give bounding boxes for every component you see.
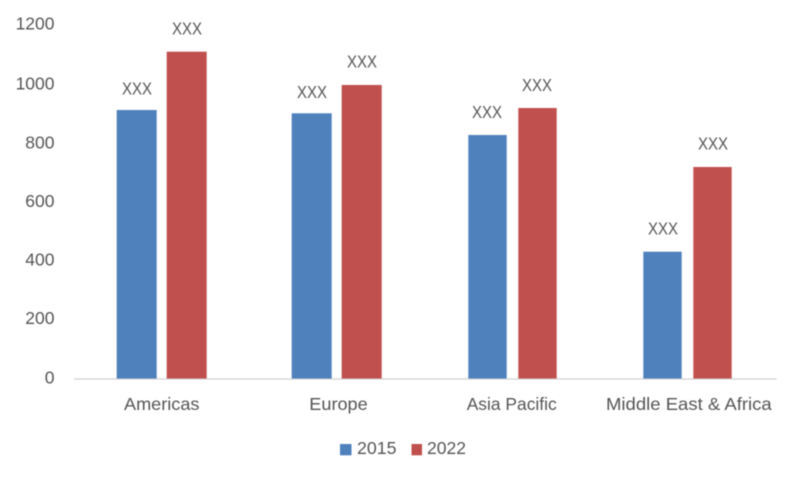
group: Europe: XXX [297,82,327,102]
group: Middle East & Africa: XXX [698,134,728,154]
group: Asia Pacific: XXX [522,75,552,95]
y axis labels: 600 [25,191,55,211]
group: Europe [292,52,382,378]
x axis labels: Americas [124,394,200,414]
y axis labels [16,14,55,388]
group: Middle East & Africa: XXX [648,218,678,238]
group: Europe: XXX [347,52,377,72]
group: Americas [117,18,207,378]
y axis labels: 0 [45,368,55,388]
y axis labels: 200 [25,308,55,328]
y axis labels: 400 [25,250,55,270]
group: Asia Pacific: XXX [472,102,502,122]
x axis labels [124,394,772,414]
legend: 2022 [427,438,466,458]
legend [340,438,466,458]
x axis labels: Middle East & Africa [606,394,772,414]
legend: 2015 [357,438,396,458]
group: Asia Pacific [468,75,557,378]
group: Middle East & Africa [643,134,732,378]
group: Americas: XXX [172,18,202,38]
y axis labels: 1200 [16,14,55,34]
x axis labels: Europe [309,394,368,414]
x axis labels: Asia Pacific [467,394,557,414]
y axis labels: 800 [25,132,55,152]
group: Americas: XXX [122,78,152,98]
y axis labels: 1000 [16,74,55,94]
